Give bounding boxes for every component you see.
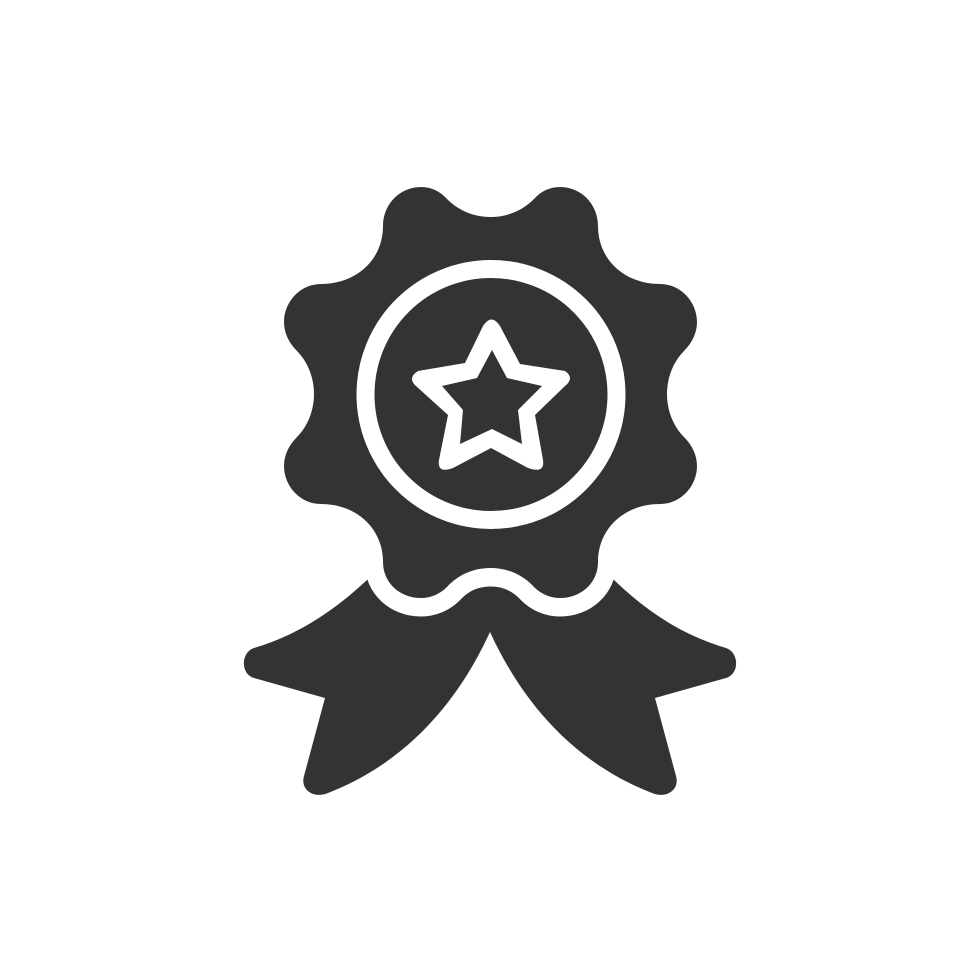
ribbon tails: [244, 560, 736, 795]
star centre: [442, 350, 542, 444]
rosette seal: [284, 187, 697, 598]
star: [412, 320, 570, 470]
inner ring: [366, 269, 616, 520]
star outline: [412, 320, 570, 470]
